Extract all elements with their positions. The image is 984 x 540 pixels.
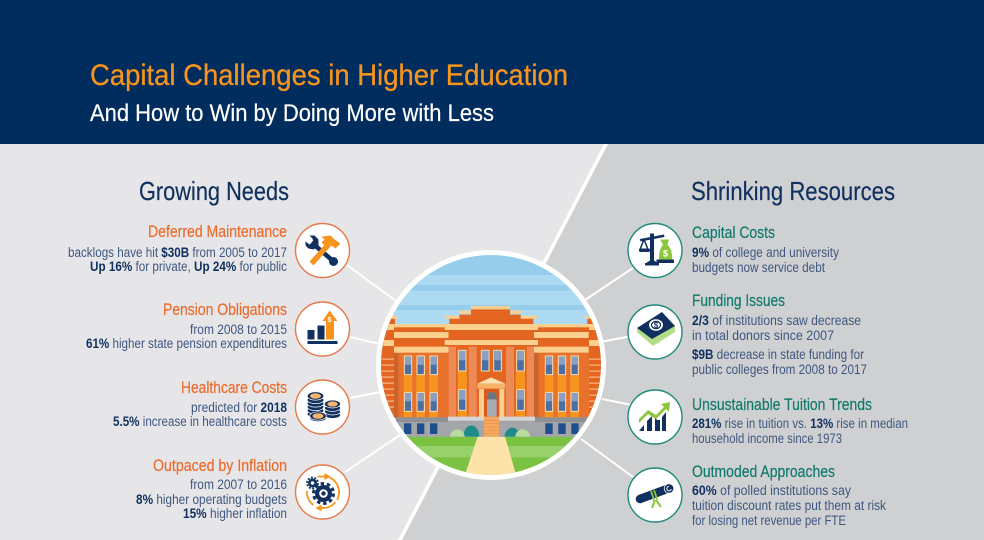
left block: deferred maintenance: Deferred Maintenance bbox=[148, 222, 287, 241]
side towers bbox=[380, 319, 395, 417]
left block: healthcare costs: predicted for 2018 bbox=[191, 400, 287, 415]
title: Capital Challenges in Higher Education bbox=[90, 59, 568, 92]
right block: outmoded approaches: tuition discount rates put them at risk bbox=[692, 498, 886, 513]
right block: capital costs: budgets now service debt bbox=[692, 260, 825, 275]
left block: deferred maintenance bbox=[68, 222, 287, 274]
orange panels bbox=[404, 372, 579, 417]
icon: hammer and wrench bbox=[296, 224, 350, 278]
heading: shrinking resources: Shrinking Resources bbox=[691, 176, 895, 206]
right block: outmoded approaches: Outmoded Approaches bbox=[692, 462, 835, 481]
wings bbox=[394, 326, 589, 418]
icon: rising bars with dollar arrow: $ bbox=[328, 317, 332, 324]
icon: coin stacks bbox=[296, 380, 350, 434]
right block: unsustainable tuition trends: Unsustainable Tuition Trends bbox=[692, 395, 872, 414]
connector lines bbox=[345, 265, 633, 477]
icon: stack of cash bbox=[628, 305, 682, 359]
left block: healthcare costs bbox=[113, 378, 287, 429]
right block: unsustainable tuition trends bbox=[692, 395, 908, 446]
shrubs bbox=[463, 425, 479, 437]
subtitle: And How to Win by Doing More with Less bbox=[90, 100, 494, 127]
right block: unsustainable tuition trends: 281% rise in tuition vs. 13% rise in median bbox=[692, 416, 908, 431]
panel: shrinking resources background bbox=[400, 144, 984, 540]
right block: funding issues: public colleges from 2008 to 2017 bbox=[692, 362, 867, 377]
right block: funding issues bbox=[692, 291, 867, 377]
lawn bbox=[408, 436, 574, 475]
central pavilion bbox=[449, 309, 533, 324]
diagonal divider bbox=[398, 144, 608, 540]
left block: outpaced by inflation bbox=[136, 456, 287, 521]
right block: capital costs: 9% of college and university bbox=[692, 245, 839, 260]
right block: outmoded approaches bbox=[692, 462, 886, 528]
building bbox=[380, 306, 603, 437]
icon: gears with cycle arrows bbox=[296, 465, 350, 519]
left block: pension obligations: from 2008 to 2015 bbox=[190, 322, 287, 337]
right block: outmoded approaches: 60% of polled institutions say bbox=[692, 483, 851, 498]
left block: deferred maintenance: backlogs have hit $30B from 2005 to 2017 bbox=[68, 245, 287, 260]
left block: pension obligations bbox=[86, 300, 287, 351]
panel: growing needs background bbox=[0, 144, 984, 540]
central building illustration bbox=[370, 250, 613, 480]
heading: growing needs: Growing Needs bbox=[139, 176, 289, 206]
left block: pension obligations: Pension Obligations bbox=[163, 300, 287, 319]
icon: stack of cash: $ bbox=[654, 321, 659, 330]
sky bbox=[381, 255, 601, 440]
icon: rising bars with dollar arrow bbox=[296, 302, 350, 356]
left block: deferred maintenance: Up 16% for private, Up 24% for public bbox=[90, 259, 287, 274]
left block: outpaced by inflation: 8% higher operating budgets bbox=[136, 492, 287, 507]
left block: healthcare costs: Healthcare Costs bbox=[181, 378, 287, 397]
right block: funding issues: in total donors since 2007 bbox=[692, 328, 834, 343]
right block: unsustainable tuition trends: household income since 1973 bbox=[692, 431, 842, 446]
left block: pension obligations: 61% higher state pension expenditures bbox=[86, 336, 287, 351]
right block: funding issues: $9B decrease in state funding for bbox=[692, 347, 864, 362]
left block: healthcare costs: 5.5% increase in healthcare costs bbox=[113, 414, 287, 429]
icon: scales with money bag: $ bbox=[663, 248, 668, 258]
right block: funding issues: Funding Issues bbox=[692, 291, 785, 310]
icon: diploma scroll bbox=[628, 468, 682, 522]
left block: outpaced by inflation: from 2007 to 2016 bbox=[190, 477, 287, 492]
entrance bbox=[484, 389, 499, 417]
icon: scales with money bag bbox=[628, 224, 682, 278]
icon: growth chart bbox=[628, 390, 682, 444]
left block: outpaced by inflation: 15% higher inflation bbox=[183, 506, 287, 521]
stone base bbox=[396, 417, 587, 437]
right block: funding issues: 2/3 of institutions saw decrease bbox=[692, 313, 861, 328]
header band bbox=[0, 0, 984, 144]
left block: outpaced by inflation: Outpaced by Inflation bbox=[153, 456, 287, 475]
right block: capital costs bbox=[692, 223, 839, 275]
right block: capital costs: Capital Costs bbox=[692, 223, 775, 242]
right block: outmoded approaches: for losing net revenue per FTE bbox=[692, 513, 846, 528]
windows bbox=[404, 350, 578, 411]
